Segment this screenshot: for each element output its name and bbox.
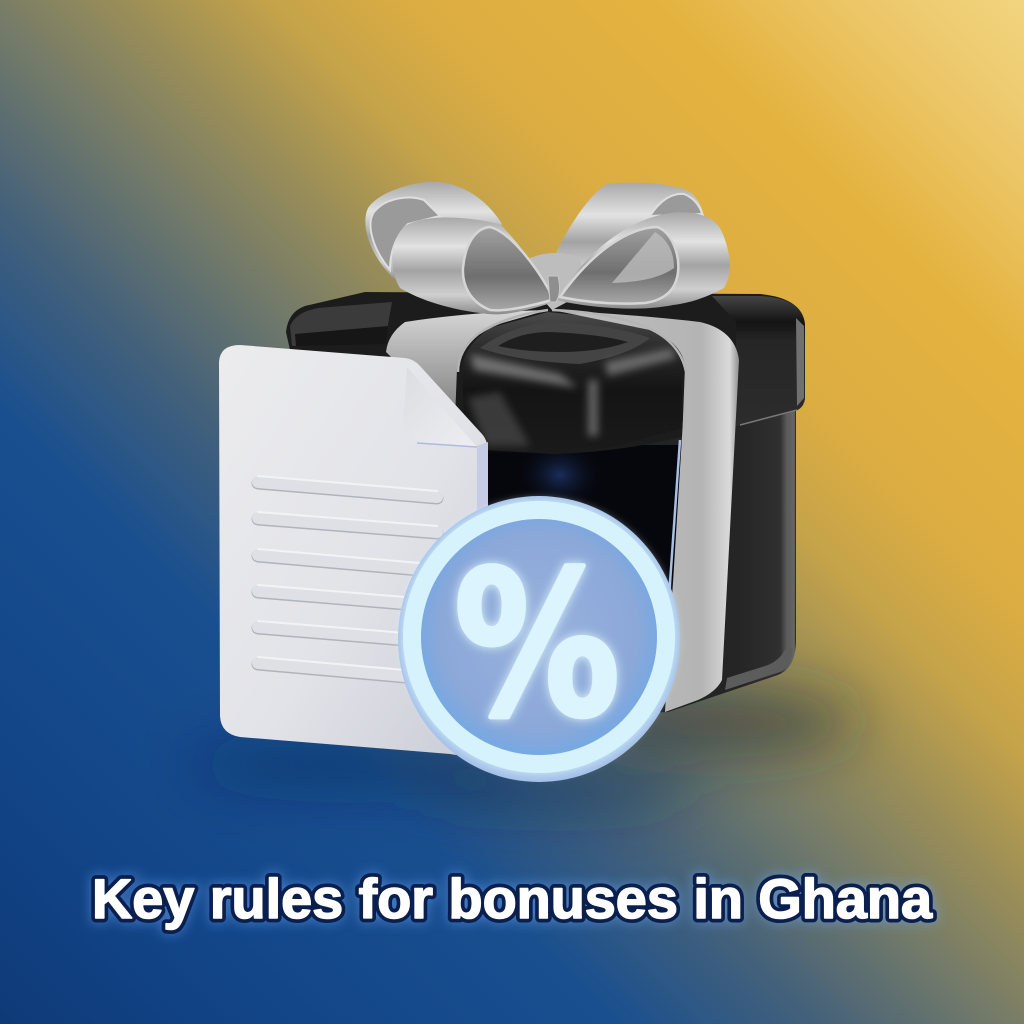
document sheet	[219, 345, 488, 760]
lid gloss highlights	[468, 348, 676, 446]
title text: Key rules for bonuses in Ghana	[92, 867, 933, 930]
front right loop	[556, 212, 730, 309]
back right loop	[556, 183, 704, 290]
front left loop	[392, 218, 554, 314]
ground shadows	[190, 686, 860, 806]
percent coin	[398, 496, 680, 782]
ribbon bow	[365, 182, 730, 314]
back left loop	[365, 182, 502, 282]
box lid	[286, 292, 805, 454]
gift box	[286, 182, 805, 720]
coin glowing ring	[412, 510, 666, 764]
bow centre tie	[548, 276, 560, 302]
title outline: Key rules for bonuses in Ghana	[92, 867, 933, 930]
document	[219, 345, 488, 760]
coin rim	[398, 496, 680, 782]
percent symbol: %	[454, 529, 620, 762]
box body	[480, 410, 796, 720]
bow knot	[530, 253, 586, 310]
folded corner	[403, 367, 477, 447]
blue right edge	[477, 442, 488, 514]
ribbon	[386, 310, 739, 712]
document text lines	[258, 476, 437, 677]
title glow: Key rules for bonuses in Ghana	[92, 867, 933, 930]
title	[92, 867, 933, 930]
